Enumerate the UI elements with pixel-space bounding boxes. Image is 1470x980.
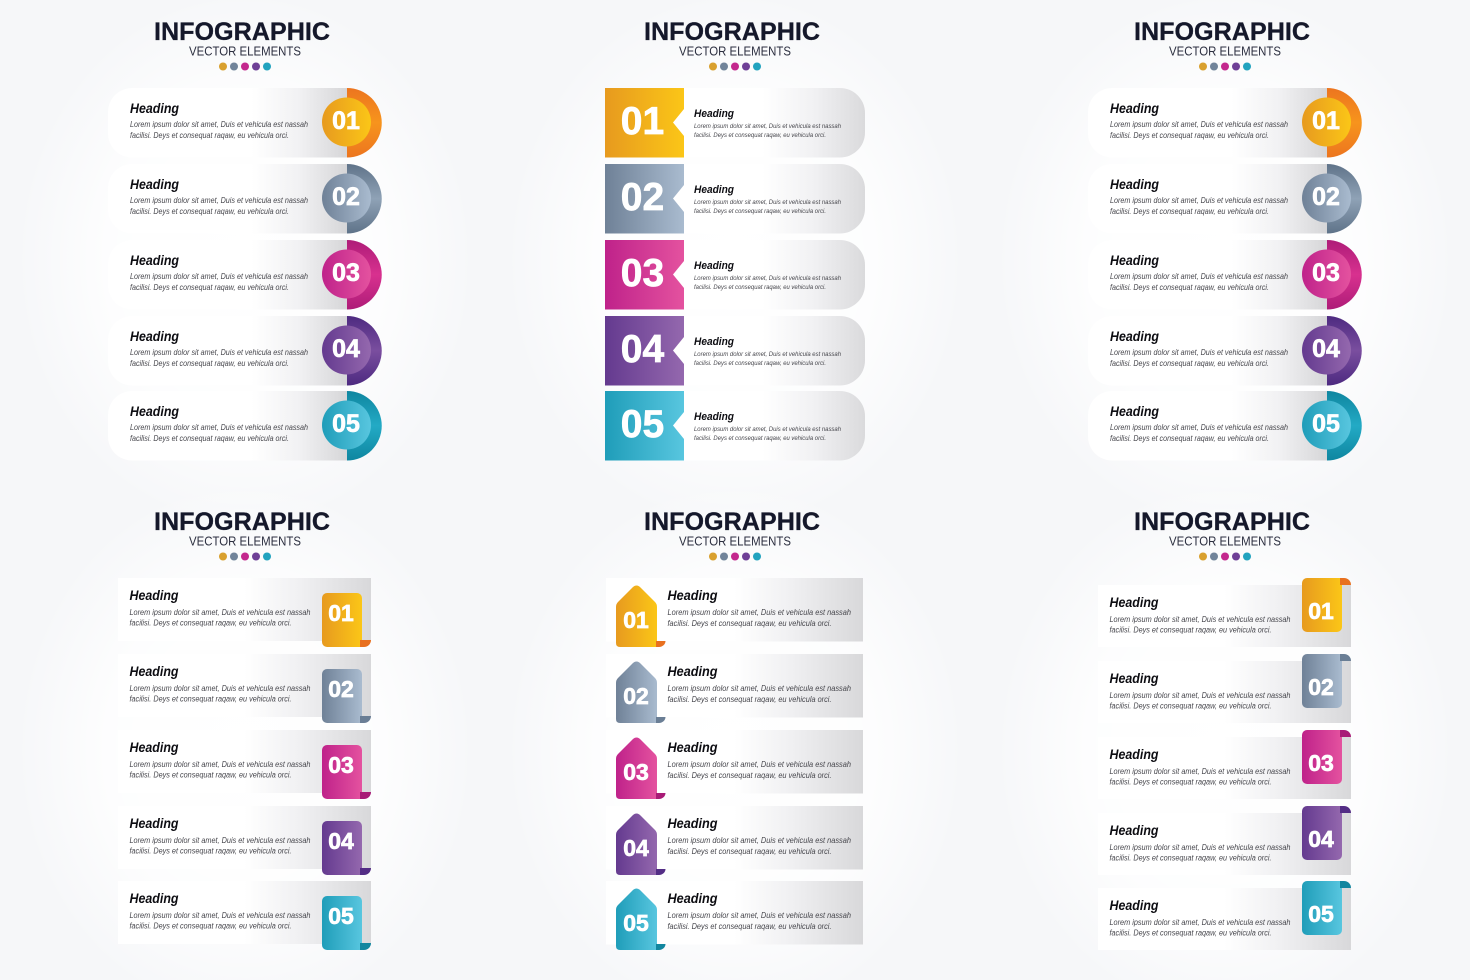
row 03: Heading: [1110, 747, 1159, 762]
title block: INFOGRAPHIC: [1134, 508, 1310, 536]
row 02: Heading: [130, 664, 179, 679]
row 05: Heading: [1110, 404, 1160, 419]
row 04: facilisi. Deys et consequat raqaw, eu vehicula orci.: [694, 360, 826, 367]
row 02: [1098, 654, 1351, 723]
row 01: Lorem ipsum dolor sit amet, Duis et vehicula est nassah: [130, 120, 308, 129]
row 04: Heading: [668, 816, 718, 831]
row 05: [108, 391, 382, 460]
row 02: Heading: [668, 664, 718, 679]
row 05: facilisi. Deys et consequat raqaw, eu vehicula orci.: [1110, 434, 1269, 443]
title block: INFOGRAPHIC: [154, 508, 330, 536]
row 04: Lorem ipsum dolor sit amet, Duis et vehicula est nassah: [130, 348, 308, 357]
row 01: Heading: [1110, 101, 1160, 116]
row 03: 03: [328, 752, 354, 778]
row 02: facilisi. Deys et consequat raqaw, eu vehicula orci.: [1110, 702, 1272, 710]
row 04: 04: [621, 328, 664, 371]
row 03: Heading: [668, 740, 718, 755]
row 02: Lorem ipsum dolor sit amet, Duis et vehicula est nassah: [130, 684, 310, 693]
row 04: 04: [623, 835, 649, 861]
row 03: Lorem ipsum dolor sit amet, Duis et vehicula est nassah: [130, 760, 310, 769]
row 01: 01: [1308, 598, 1334, 624]
row 04: 04: [332, 335, 360, 363]
row 03: [606, 730, 863, 799]
row 01: 01: [328, 600, 354, 626]
row 04: Heading: [1110, 823, 1159, 838]
row 04: facilisi. Deys et consequat raqaw, eu vehicula orci.: [668, 847, 832, 856]
title block: INFOGRAPHIC: [1134, 18, 1310, 46]
row 02: facilisi. Deys et consequat raqaw, eu vehicula orci.: [694, 208, 826, 215]
row 05: 05: [621, 403, 664, 446]
row 01: Lorem ipsum dolor sit amet, Duis et vehicula est nassah: [130, 608, 310, 617]
panel: top right circle tabs: [1088, 18, 1362, 460]
row 03: Heading: [130, 253, 180, 268]
row 03: facilisi. Deys et consequat raqaw, eu vehicula orci.: [668, 771, 832, 780]
row 01: 01: [1312, 107, 1340, 135]
row 02: Lorem ipsum dolor sit amet, Duis et vehicula est nassah: [1110, 691, 1290, 700]
row 05: Lorem ipsum dolor sit amet, Duis et vehicula est nassah: [1110, 918, 1290, 927]
row 05: [1088, 391, 1362, 460]
row 05: [1098, 881, 1351, 950]
panel: bottom middle house tiles: [606, 508, 863, 950]
row 05: Lorem ipsum dolor sit amet, Duis et vehicula est nassah: [130, 423, 308, 432]
panel: top left circle tabs: [108, 18, 382, 460]
row 02: facilisi. Deys et consequat raqaw, eu vehicula orci.: [668, 695, 832, 704]
row 05: 05: [1308, 901, 1334, 927]
row 05: facilisi. Deys et consequat raqaw, eu vehicula orci.: [130, 434, 289, 443]
row 05: facilisi. Deys et consequat raqaw, eu vehicula orci.: [668, 922, 832, 931]
row 04: 04: [328, 828, 354, 854]
row 03: [1088, 240, 1362, 310]
row 03: 03: [621, 252, 664, 295]
row 01: [108, 88, 382, 158]
row 05: facilisi. Deys et consequat raqaw, eu vehicula orci.: [130, 922, 292, 930]
panel: bottom left folded tiles: [118, 508, 371, 950]
title block: VECTOR ELEMENTS: [1169, 44, 1281, 58]
title block: INFOGRAPHIC: [154, 18, 330, 46]
row 04: [605, 316, 865, 386]
row 05: Lorem ipsum dolor sit amet, Duis et vehicula est nassah: [694, 426, 841, 433]
row 05: Heading: [1110, 898, 1159, 913]
row 04: facilisi. Deys et consequat raqaw, eu vehicula orci.: [130, 359, 289, 368]
row 05: Heading: [130, 404, 180, 419]
row 02: 02: [328, 676, 354, 702]
row 02: [1088, 164, 1362, 234]
row 04: [606, 806, 863, 875]
row 02: [108, 164, 382, 234]
row 04: Lorem ipsum dolor sit amet, Duis et vehicula est nassah: [1110, 843, 1290, 852]
row 04: [1098, 806, 1351, 875]
row 01: [605, 88, 865, 158]
row 01: facilisi. Deys et consequat raqaw, eu vehicula orci.: [1110, 131, 1269, 140]
row 03: Lorem ipsum dolor sit amet, Duis et vehicula est nassah: [1110, 767, 1290, 776]
row 01: 01: [332, 107, 360, 135]
row 02: 02: [332, 183, 360, 211]
row 03: [605, 240, 865, 310]
row 04: Lorem ipsum dolor sit amet, Duis et vehicula est nassah: [668, 836, 851, 845]
row 03: Lorem ipsum dolor sit amet, Duis et vehicula est nassah: [668, 760, 851, 769]
title block: [1134, 18, 1310, 70]
row 04: 04: [1308, 826, 1334, 852]
row 04: Lorem ipsum dolor sit amet, Duis et vehicula est nassah: [1110, 348, 1288, 357]
row 02: Heading: [1110, 671, 1159, 686]
title block: [154, 508, 330, 560]
row 03: Lorem ipsum dolor sit amet, Duis et vehicula est nassah: [694, 275, 841, 282]
row 03: facilisi. Deys et consequat raqaw, eu vehicula orci.: [130, 770, 292, 780]
row 05: Lorem ipsum dolor sit amet, Duis et vehicula est nassah: [1110, 423, 1288, 432]
row 01: facilisi. Deys et consequat raqaw, eu vehicula orci.: [694, 132, 826, 139]
row 05: Lorem ipsum dolor sit amet, Duis et vehicula est nassah: [668, 911, 851, 920]
row 01: Heading: [694, 108, 734, 120]
row 05: Heading: [130, 891, 179, 906]
row 02: [118, 654, 371, 723]
row 04: Heading: [694, 336, 734, 348]
row 04: [118, 806, 371, 875]
row 01: Lorem ipsum dolor sit amet, Duis et vehicula est nassah: [668, 608, 851, 617]
row 02: Lorem ipsum dolor sit amet, Duis et vehicula est nassah: [130, 196, 308, 205]
row 02: Lorem ipsum dolor sit amet, Duis et vehicula est nassah: [1110, 196, 1288, 205]
row 03: Heading: [130, 740, 179, 755]
row 01: Heading: [130, 101, 180, 116]
row 04: Heading: [130, 816, 179, 831]
title block: VECTOR ELEMENTS: [1169, 534, 1281, 548]
title block: VECTOR ELEMENTS: [679, 534, 791, 548]
panel: top middle square tabs: [605, 18, 865, 460]
row 01: Lorem ipsum dolor sit amet, Duis et vehicula est nassah: [1110, 615, 1290, 624]
panel: bottom right raised tiles: [1098, 508, 1351, 950]
row 05: Lorem ipsum dolor sit amet, Duis et vehicula est nassah: [130, 911, 310, 920]
row 03: [118, 730, 371, 799]
row 02: [605, 164, 865, 234]
row 01: [1088, 88, 1362, 158]
title block: [644, 18, 820, 70]
row 04: Heading: [130, 329, 180, 344]
row 04: Lorem ipsum dolor sit amet, Duis et vehicula est nassah: [130, 836, 310, 845]
row 03: 03: [623, 759, 649, 785]
row 03: [1098, 730, 1351, 799]
row 05: 05: [623, 910, 649, 936]
title block: VECTOR ELEMENTS: [679, 44, 791, 58]
row 01: facilisi. Deys et consequat raqaw, eu vehicula orci.: [668, 619, 832, 628]
row 02: 02: [1312, 183, 1340, 211]
row 02: Heading: [694, 184, 734, 196]
row 03: 03: [332, 259, 360, 287]
row 01: [1098, 578, 1351, 647]
row 05: facilisi. Deys et consequat raqaw, eu vehicula orci.: [694, 435, 826, 442]
row 02: Lorem ipsum dolor sit amet, Duis et vehicula est nassah: [694, 199, 841, 206]
row 04: facilisi. Deys et consequat raqaw, eu vehicula orci.: [1110, 854, 1272, 862]
row 04: [1088, 316, 1362, 386]
row 04: [108, 316, 382, 386]
row 02: 02: [1308, 674, 1334, 700]
row 01: Heading: [1110, 595, 1159, 610]
row 04: Heading: [1110, 329, 1160, 344]
row 03: facilisi. Deys et consequat raqaw, eu vehicula orci.: [130, 283, 289, 292]
row 01: facilisi. Deys et consequat raqaw, eu vehicula orci.: [130, 618, 292, 628]
title block: INFOGRAPHIC: [644, 508, 820, 536]
row 02: Heading: [130, 177, 180, 192]
row 05: 05: [332, 410, 360, 438]
row 02: facilisi. Deys et consequat raqaw, eu vehicula orci.: [130, 694, 292, 704]
row 05: 05: [328, 903, 354, 929]
row 01: facilisi. Deys et consequat raqaw, eu vehicula orci.: [130, 131, 289, 140]
row 05: Heading: [694, 411, 734, 423]
row 02: facilisi. Deys et consequat raqaw, eu vehicula orci.: [130, 207, 289, 216]
row 03: facilisi. Deys et consequat raqaw, eu vehicula orci.: [1110, 283, 1269, 292]
title block: INFOGRAPHIC: [644, 18, 820, 46]
row 03: 03: [1308, 750, 1334, 776]
row 05: Heading: [668, 891, 718, 906]
title block: VECTOR ELEMENTS: [189, 44, 301, 58]
row 03: Heading: [694, 260, 734, 272]
row 05: [118, 881, 371, 950]
row 03: facilisi. Deys et consequat raqaw, eu vehicula orci.: [1110, 778, 1272, 786]
row 01: [606, 578, 863, 647]
row 02: 02: [621, 176, 664, 219]
row 04: facilisi. Deys et consequat raqaw, eu vehicula orci.: [1110, 359, 1269, 368]
row 01: Lorem ipsum dolor sit amet, Duis et vehicula est nassah: [694, 123, 841, 130]
row 05: facilisi. Deys et consequat raqaw, eu vehicula orci.: [1110, 928, 1272, 938]
row 03: 03: [1312, 259, 1340, 287]
row 01: 01: [623, 607, 649, 633]
row 03: [108, 240, 382, 310]
row 03: Lorem ipsum dolor sit amet, Duis et vehicula est nassah: [130, 272, 308, 281]
row 03: Lorem ipsum dolor sit amet, Duis et vehicula est nassah: [1110, 272, 1288, 281]
row 05: [605, 391, 865, 460]
row 02: 02: [623, 683, 649, 709]
row 02: Heading: [1110, 177, 1160, 192]
row 01: facilisi. Deys et consequat raqaw, eu vehicula orci.: [1110, 626, 1272, 634]
row 02: Lorem ipsum dolor sit amet, Duis et vehicula est nassah: [668, 684, 851, 693]
title block: VECTOR ELEMENTS: [189, 534, 301, 548]
row 04: 04: [1312, 335, 1340, 363]
row 01: Heading: [130, 588, 179, 603]
title block: [154, 18, 330, 70]
row 01: 01: [621, 100, 664, 143]
row 04: Lorem ipsum dolor sit amet, Duis et vehicula est nassah: [694, 351, 841, 358]
row 02: [606, 654, 863, 723]
row 01: Heading: [668, 588, 718, 603]
row 02: facilisi. Deys et consequat raqaw, eu vehicula orci.: [1110, 207, 1269, 216]
title block: [644, 508, 820, 560]
title block: [1134, 508, 1310, 560]
row 05: 05: [1312, 410, 1340, 438]
row 04: facilisi. Deys et consequat raqaw, eu vehicula orci.: [130, 846, 292, 856]
row 01: Lorem ipsum dolor sit amet, Duis et vehicula est nassah: [1110, 120, 1288, 129]
row 05: [606, 881, 863, 950]
row 01: [118, 578, 371, 647]
row 03: Heading: [1110, 253, 1160, 268]
row 03: facilisi. Deys et consequat raqaw, eu vehicula orci.: [694, 284, 826, 291]
